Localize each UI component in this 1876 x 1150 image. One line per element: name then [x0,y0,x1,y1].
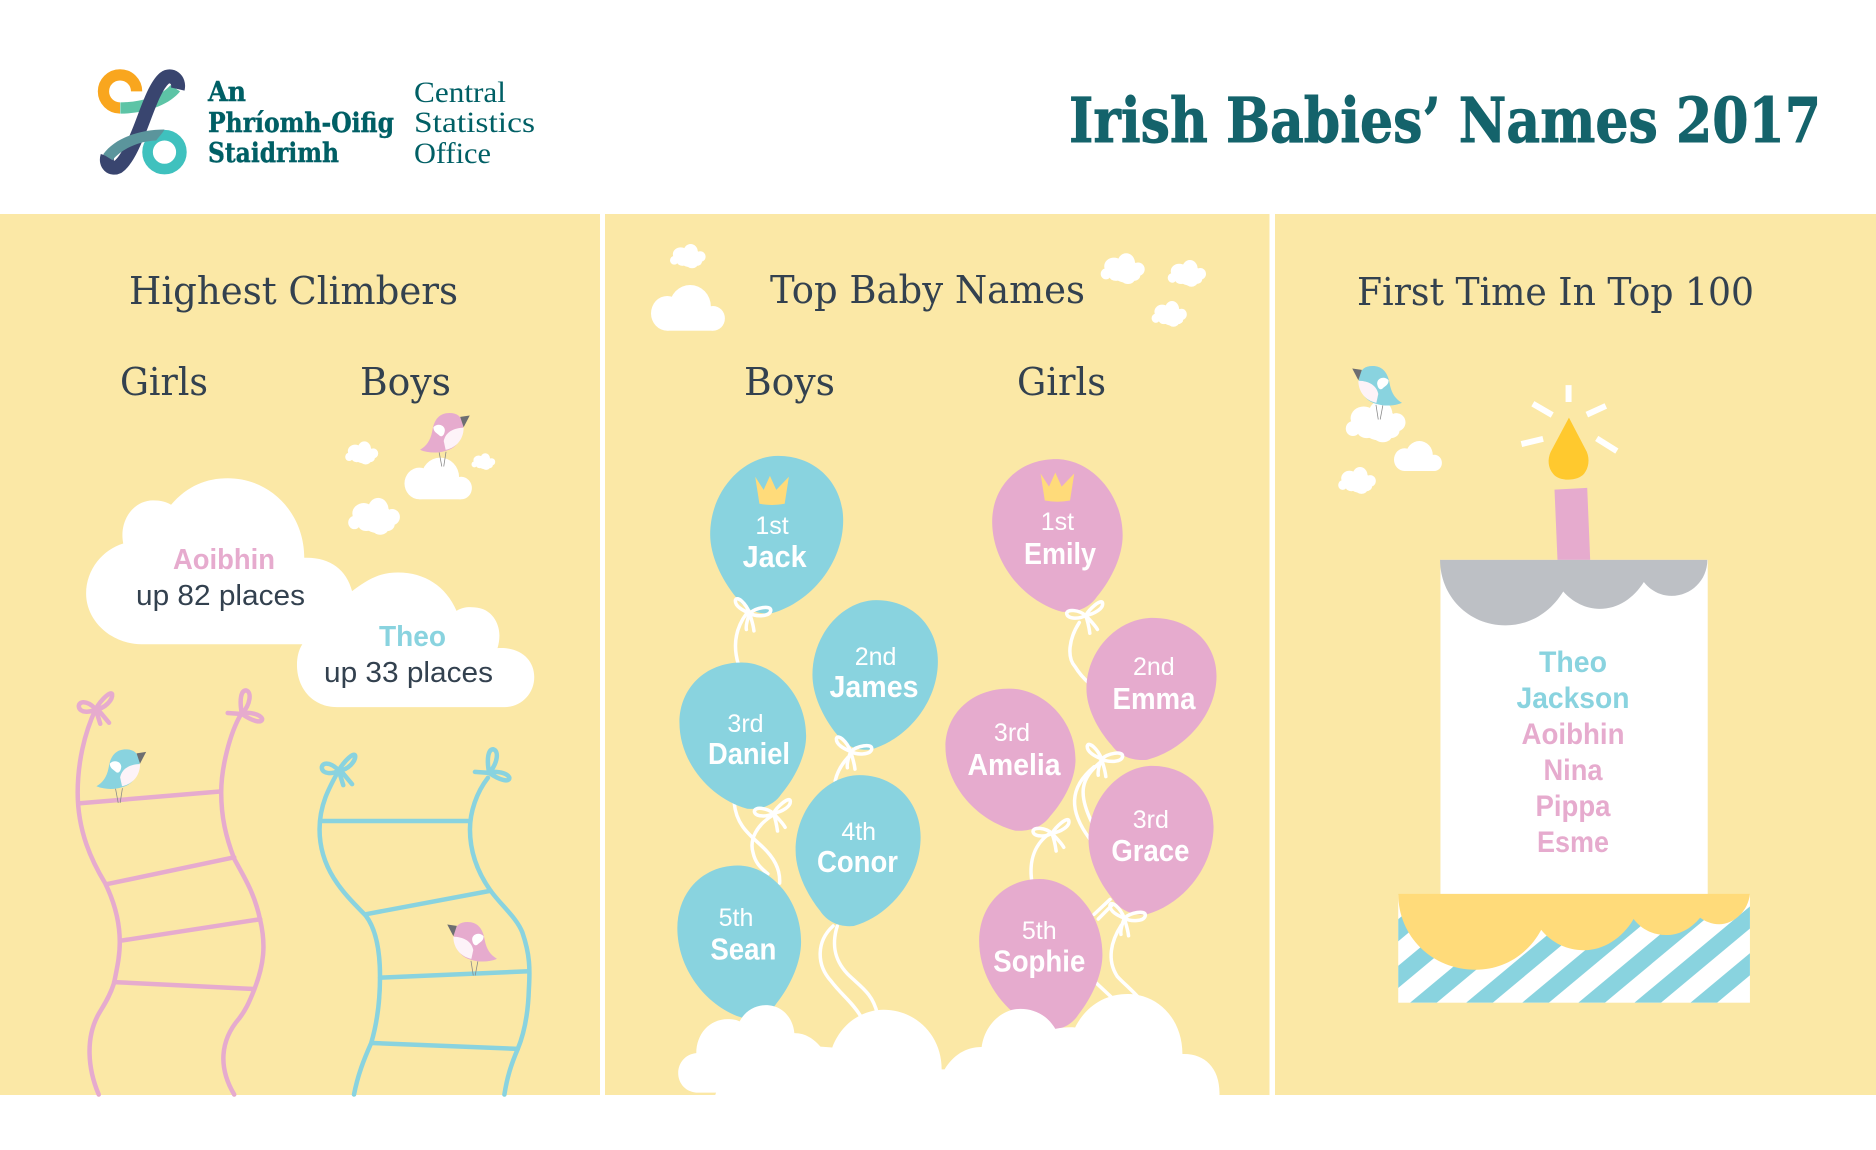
text: new names list: Esme [1537,826,1609,859]
cake illustration [1398,385,1750,1003]
striped cake base [1398,894,1750,1003]
balloon: 2nd Emma: 2nd [1133,653,1175,681]
text: new names list: Jackson [1516,682,1630,715]
balloon: 4th Conor [796,775,921,926]
logo text: English name: Statistics [414,106,535,139]
balloon: 2nd Emma [1086,618,1217,760]
logo text: English name: Office [414,137,491,170]
heading: girls: Girls [1017,360,1106,404]
grey icing [1440,560,1707,625]
balloon: 3rd Amelia: 3rd [994,719,1030,747]
balloon: 3rd Daniel: Daniel [708,736,790,771]
balloon: 2nd James: 2nd [855,643,896,671]
ladder: girls [78,690,263,1095]
balloon: 2nd James [812,600,938,769]
balloon: 5th Sophie: 5th [1022,917,1057,945]
heading: boys: Boys [360,360,451,404]
cloud bank [678,994,1219,1095]
text: new names list: Pippa [1536,790,1611,823]
balloon: 3rd Amelia: Amelia [968,747,1061,782]
text: new names list: Theo [1539,646,1607,679]
panel: first time in top 100 [1242,214,1876,1095]
icon: pink bird on cloud [420,413,470,467]
yellow icing [1398,894,1750,970]
cake body [1440,560,1708,895]
balloon: 2nd Emma: Emma [1112,681,1196,716]
balloon: 5th Sean [677,865,801,1018]
candle flame rays [1521,385,1617,451]
cloud: Theo [297,573,534,707]
balloon strings [734,613,1138,1016]
balloon: 5th Sean: 5th [719,904,753,932]
icon: pink bird on ladder [447,922,497,976]
balloon: 1st Jack: Jack [743,539,807,574]
text: Theo up 33 places [324,621,493,689]
balloon: 5th Sean: Sean [710,932,776,966]
small clouds [345,441,495,535]
logo text: Irish name: Phríomh-Oifig [208,108,394,139]
text: Aoibhin up 82 places [136,544,305,612]
candle flame [1549,418,1589,480]
ladder: boys [320,749,529,1095]
text: Aoibhin up 82 places: Aoibhin [173,544,275,576]
balloon: 3rd Daniel: 3rd [727,710,764,738]
balloon: 1st Jack [710,456,843,631]
icon: blue bird on cloud [1352,366,1402,420]
heading: top baby names: Top Baby Names [770,268,1085,312]
balloon: 5th Sophie [979,879,1145,1030]
cloud: Aoibhin [86,478,352,645]
panel: highest climbers [0,214,600,1095]
heading: highest climbers: Highest Climbers [129,269,458,313]
logo text: English name [414,76,535,170]
balloon: 2nd James: James [830,669,918,704]
balloon: 5th Sophie: Sophie [993,944,1085,978]
logo text: English name: Central [414,76,506,109]
balloon: 3rd Grace [1087,744,1214,915]
text: new names list: Aoibhin [1522,718,1624,751]
icon: blue bird on ladder [96,749,146,803]
balloon: 1st Emily: Emily [1024,536,1097,571]
text: Theo up 33 places: Theo [379,621,446,653]
logo mark [103,75,181,169]
text: new names list: Nina [1544,754,1603,787]
balloon: 3rd Amelia [945,689,1076,851]
text: Theo up 33 places: up 33 places [324,657,493,689]
logo text: Irish name [207,77,394,169]
balloon: 3rd Daniel [679,663,806,831]
balloon: 1st Emily [992,459,1123,633]
balloon: 1st Emily: 1st [1041,508,1074,536]
candle [1555,488,1590,561]
balloon: 3rd Grace: Grace [1111,833,1189,868]
balloon: 4th Conor: 4th [841,818,876,846]
heading: boys: Boys [744,360,835,404]
heading: first time in top 100: First Time In Top 100 [1357,270,1754,314]
decorative clouds [1338,401,1442,494]
balloon: 1st Jack: 1st [755,512,789,540]
decorative clouds [651,244,1206,331]
balloon: 3rd Grace: 3rd [1133,806,1169,834]
panel: top baby names [605,214,1270,1095]
text: Aoibhin up 82 places: up 82 places [136,580,305,612]
heading: girls: Girls [120,360,208,404]
logo text: Irish name: Staidrimh [208,138,339,169]
text: new names list [1516,646,1630,859]
logo [103,75,535,170]
logo text: Irish name: An [207,77,246,108]
balloon: 4th Conor: Conor [817,844,898,879]
